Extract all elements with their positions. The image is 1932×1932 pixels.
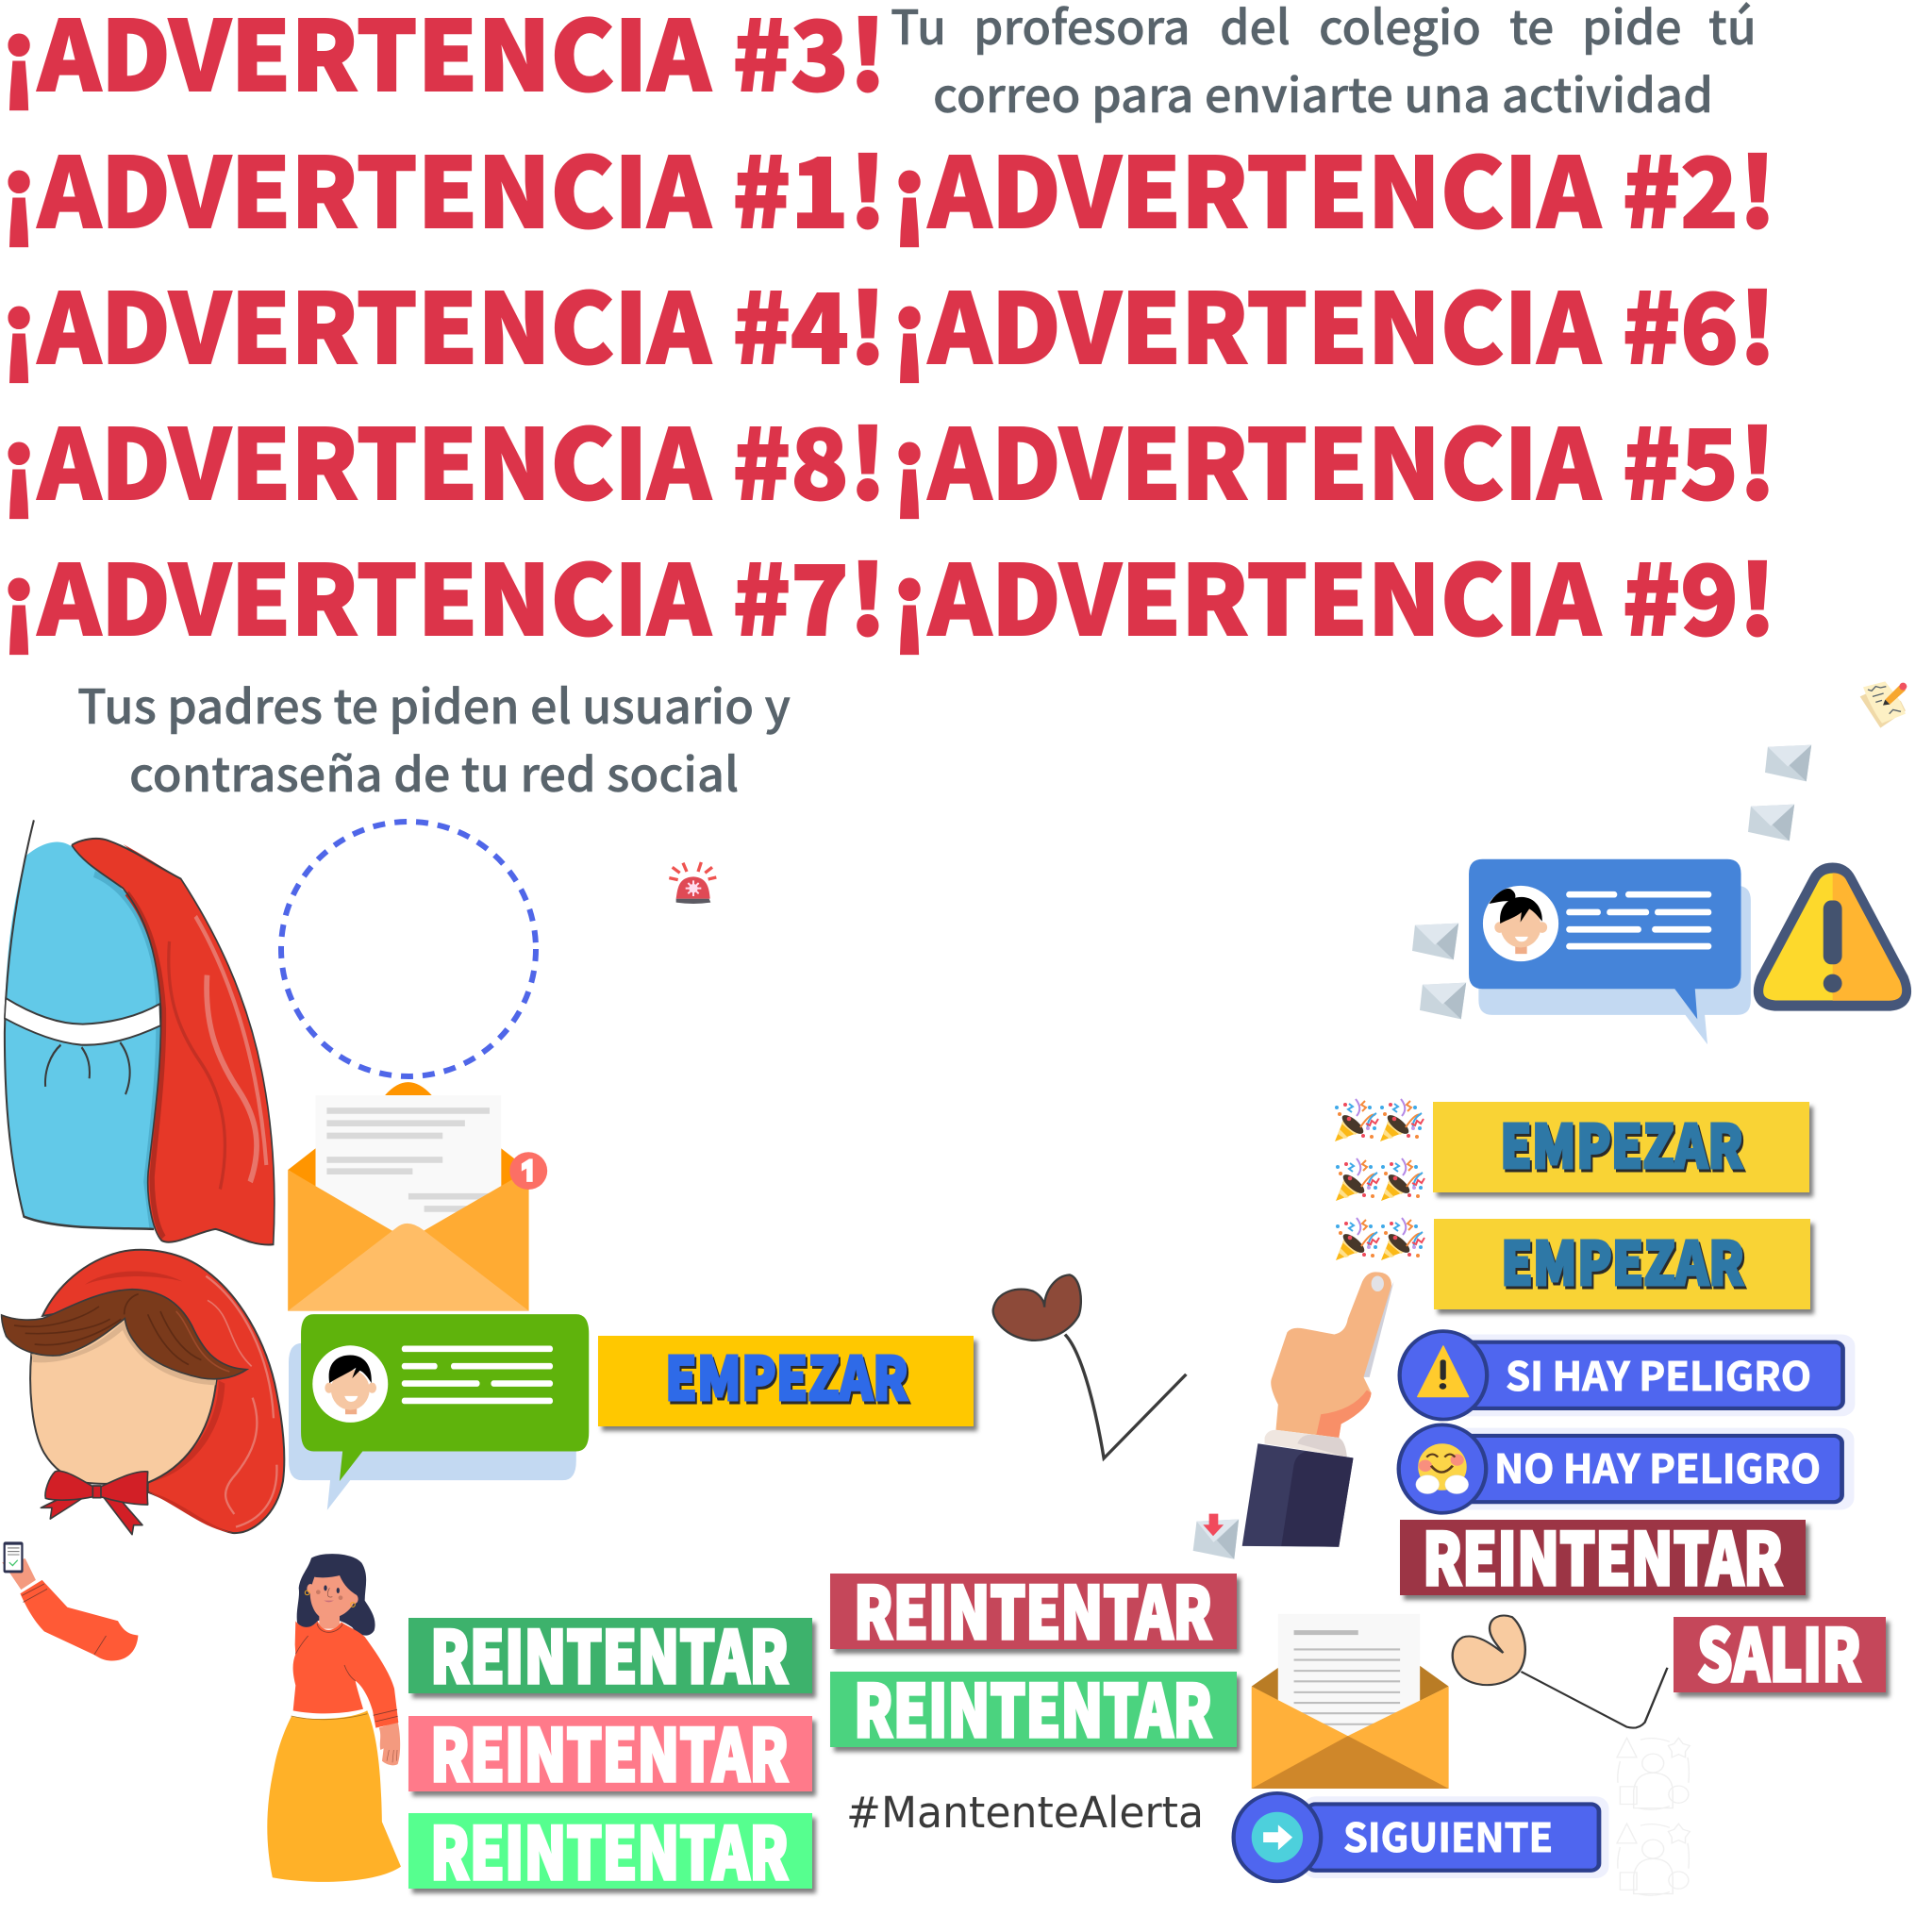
button: EMPEZAR yellow two: EMPEZAR [1501, 1217, 1744, 1303]
phone [4, 1541, 24, 1573]
text block: profesora line two: correo para enviarte una actividad [933, 58, 1713, 126]
icon: pointing hand with sleeve [1242, 1272, 1393, 1547]
heading: ¡ADVERTENCIA #9!: ¡ADVERTENCIA #9! [891, 525, 1776, 663]
heading: ¡ADVERTENCIA #1!: ¡ADVERTENCIA #1! [0, 117, 887, 256]
badge [509, 1152, 547, 1190]
button: SIGUIENTE [1234, 1793, 1608, 1881]
icon: envelope top right [1765, 745, 1811, 781]
illustration: body with red hair [5, 820, 275, 1244]
button: EMPEZAR orange: EMPEZAR [665, 1332, 908, 1418]
icon: party popper [1336, 1218, 1379, 1260]
heading: ¡ADVERTENCIA #6!: ¡ADVERTENCIA #6! [891, 253, 1776, 391]
text block: padres line two: contraseña de tu red social [129, 738, 739, 806]
balloon: brown with string [993, 1274, 1186, 1458]
button: SALIR: SALIR [1697, 1598, 1861, 1702]
hashtag: #MantenteAlerta [846, 1788, 1204, 1838]
heading: ¡ADVERTENCIA #7!: ¡ADVERTENCIA #7! [0, 525, 887, 663]
button: REINTENTAR light green: REINTENTAR [854, 1654, 1212, 1757]
icon: party popper [1335, 1099, 1378, 1141]
button: REINTENTAR mint: REINTENTAR [430, 1796, 789, 1900]
button: EMPEZAR orange [598, 1332, 974, 1426]
avatar [312, 1345, 388, 1423]
button: REINTENTAR red: REINTENTAR [854, 1556, 1212, 1659]
button: SI HAY PELIGRO [1400, 1331, 1855, 1420]
text block: padres: Tus padres te piden el usuario y [77, 670, 791, 738]
siren icon [669, 862, 716, 904]
icon: envelope with red arrow [1193, 1514, 1239, 1559]
icon: party popper [1336, 1158, 1379, 1201]
heading: ¡ADVERTENCIA #5!: ¡ADVERTENCIA #5! [891, 389, 1776, 527]
illustration: woman in orange and yellow [267, 1554, 401, 1882]
icon: note with pencil [1860, 681, 1907, 728]
button: SIGUIENTE: SIGUIENTE [1343, 1807, 1553, 1864]
icon: party popper [1381, 1218, 1424, 1260]
button: REINTENTAR pink: REINTENTAR [430, 1698, 789, 1802]
icon: envelope left of bubble [1412, 924, 1458, 959]
button: EMPEZAR yellow one: EMPEZAR [1500, 1100, 1743, 1186]
button: REINTENTAR green: REINTENTAR [430, 1600, 789, 1704]
illustration: face with red hair and bow [2, 1250, 284, 1535]
heading: ¡ADVERTENCIA #4!: ¡ADVERTENCIA #4! [0, 253, 887, 391]
button: REINTENTAR dark red: REINTENTAR [1423, 1502, 1783, 1606]
button: NO HAY PELIGRO: NO HAY PELIGRO [1494, 1438, 1821, 1495]
balloon: peach with string [1453, 1616, 1667, 1728]
icon: warning triangle [1758, 868, 1907, 1006]
heading: ¡ADVERTENCIA #8!: ¡ADVERTENCIA #8! [0, 389, 887, 527]
icon: yellow envelope with letter [1252, 1614, 1449, 1789]
icon: party popper [1381, 1158, 1424, 1201]
icon: orange open envelope with badge [288, 1082, 547, 1311]
heading: ¡ADVERTENCIA #2!: ¡ADVERTENCIA #2! [891, 117, 1776, 256]
illustration: arm holding phone [2, 1541, 138, 1660]
icon: party popper [1380, 1099, 1424, 1141]
button: SI HAY PELIGRO: SI HAY PELIGRO [1506, 1345, 1811, 1403]
avatar [1483, 886, 1558, 961]
speech bubble: blue with avatar [1469, 859, 1751, 1044]
faint icons bottom right [1617, 1738, 1690, 1895]
icon: envelope lower left of bubble [1420, 983, 1466, 1019]
speech bubble: green with avatar [289, 1314, 589, 1510]
button: NO HAY PELIGRO [1399, 1424, 1854, 1513]
bow [41, 1471, 148, 1535]
dashed circle [281, 822, 536, 1076]
icon: envelope second [1748, 805, 1794, 841]
